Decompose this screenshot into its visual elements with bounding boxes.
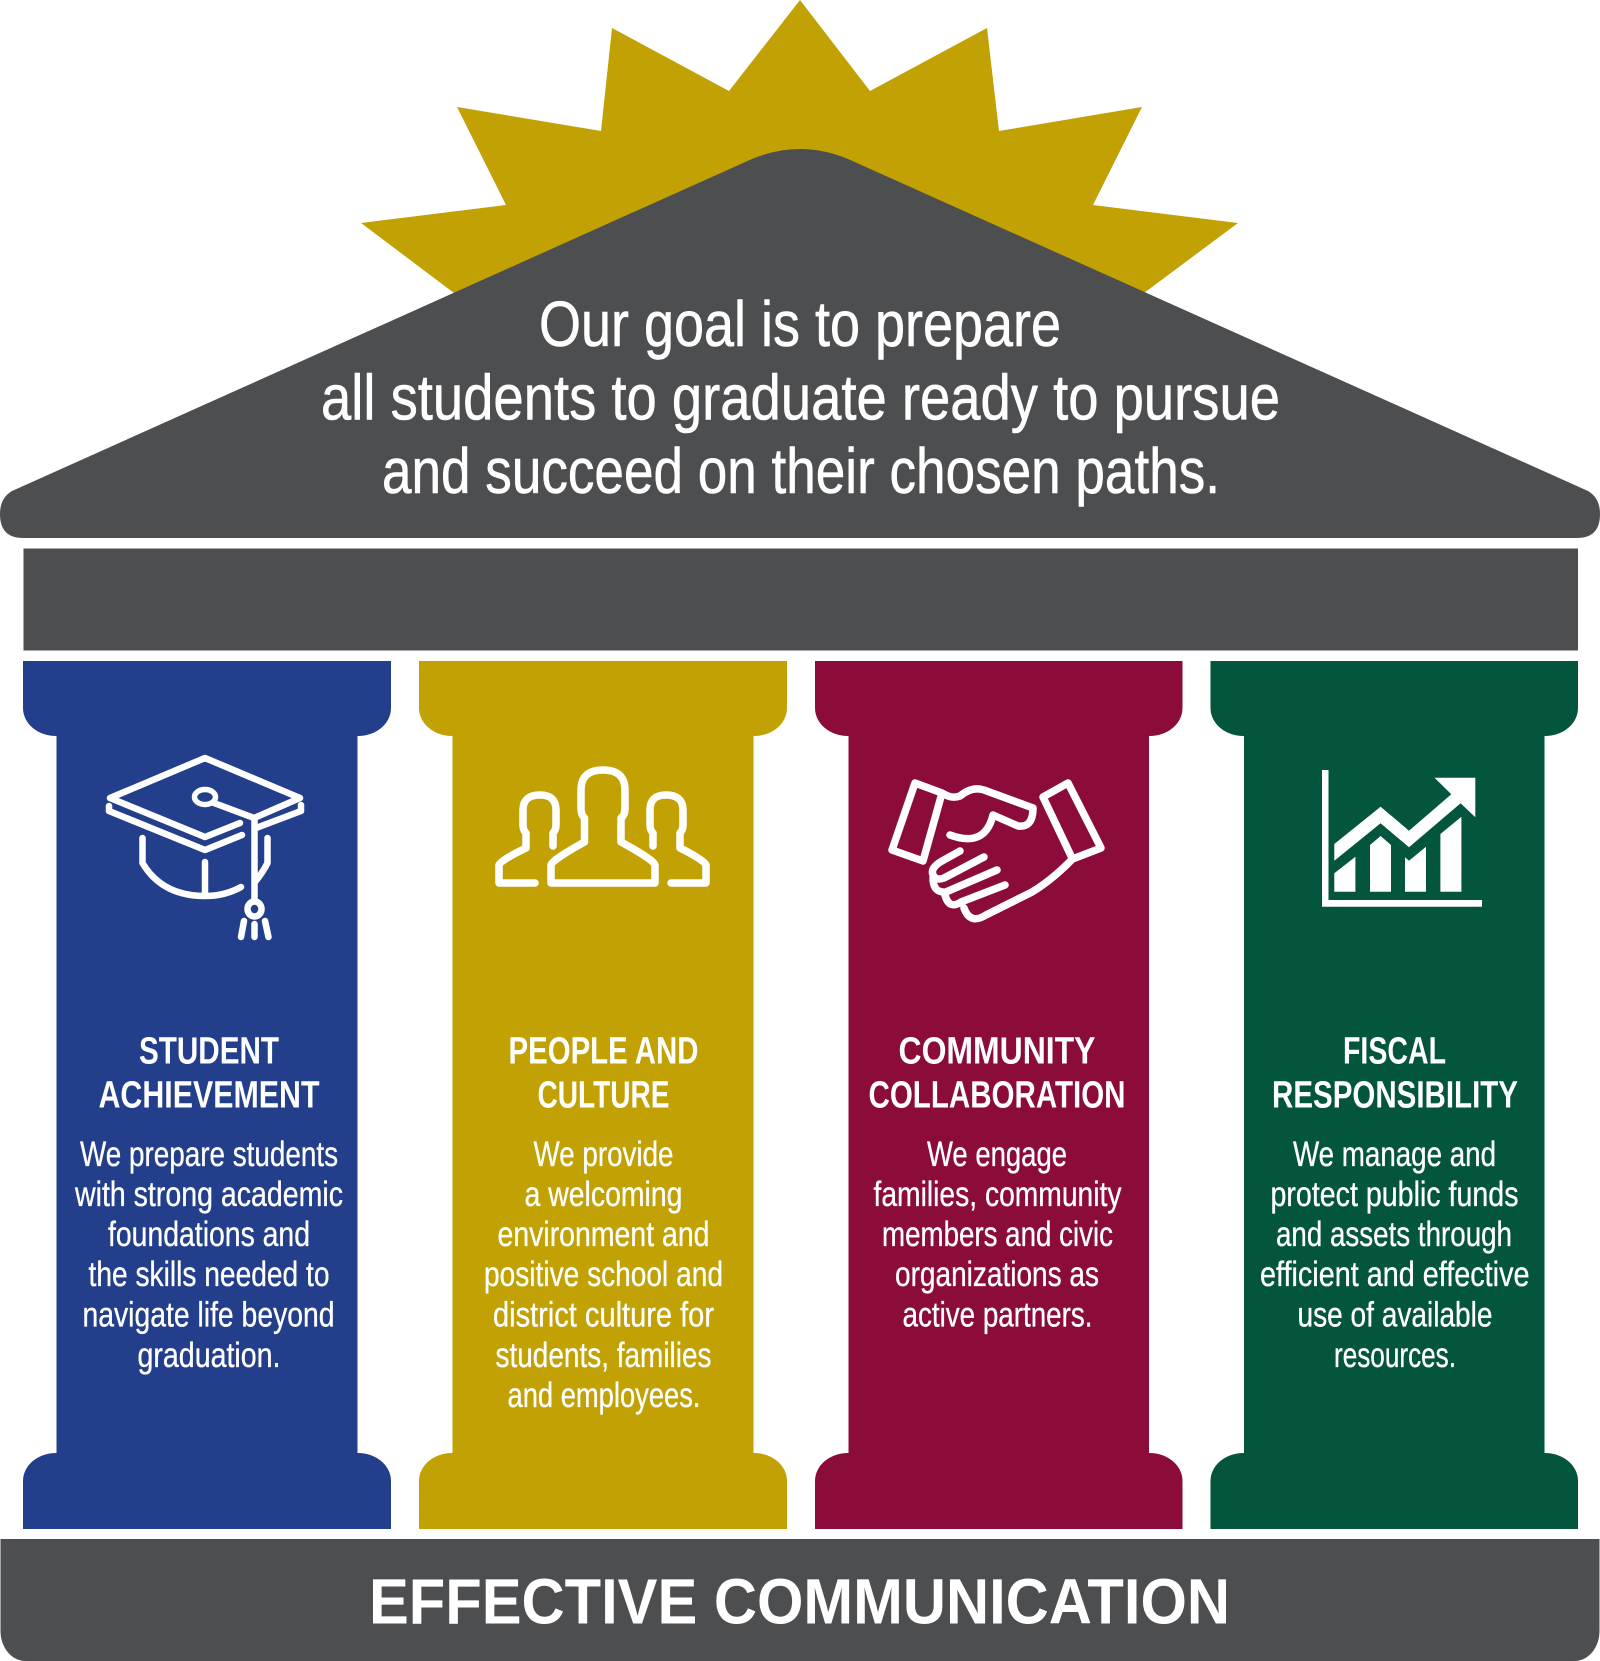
- foundation label: EFFECTIVE COMMUNICATION: [369, 1566, 1230, 1638]
- pillar shape: green: [1210, 661, 1578, 1529]
- text: community collaboration description: members and civic: [882, 1215, 1113, 1254]
- roof: [0, 149, 1600, 538]
- text: fiscal responsibility description: use of available: [1298, 1296, 1492, 1334]
- heading: community collaboration: COLLABORATION: [868, 1074, 1126, 1116]
- icon: group of people: [499, 770, 706, 883]
- text: fiscal responsibility description: We manage and: [1293, 1135, 1496, 1174]
- text: student achievement description: graduation.: [138, 1336, 280, 1375]
- pillar shape: gold: [419, 661, 787, 1529]
- text: community collaboration description: [874, 1135, 1122, 1334]
- heading: people and culture: CULTURE: [538, 1074, 670, 1116]
- heading: student achievement: STUDENT: [139, 1030, 279, 1072]
- pillar shape: blue: [23, 661, 391, 1529]
- text: people and culture description: positive school and: [484, 1255, 723, 1294]
- text: community collaboration description: families, community: [874, 1175, 1122, 1214]
- heading: community collaboration: COMMUNITY: [898, 1030, 1096, 1072]
- foundation base: [0, 1539, 1600, 1661]
- panel: student achievement pillar: [23, 661, 391, 1529]
- goal statement: all students to graduate ready to pursue: [321, 362, 1280, 434]
- text: community collaboration description: We engage: [927, 1135, 1067, 1174]
- text: people and culture description: [484, 1135, 723, 1415]
- text: people and culture description: We provide: [534, 1135, 674, 1174]
- heading: student achievement: ACHIEVEMENT: [98, 1074, 320, 1116]
- text: fiscal responsibility description: protect public funds: [1270, 1175, 1518, 1214]
- icon: handshake: [892, 783, 1101, 919]
- goal statement: and succeed on their chosen paths.: [382, 435, 1220, 507]
- panel: community collaboration pillar: [815, 661, 1183, 1529]
- text: fiscal responsibility description: and assets through: [1276, 1215, 1512, 1254]
- text: student achievement description: [74, 1135, 343, 1375]
- icon: rising bar chart with arrow: [1322, 770, 1482, 907]
- text: student achievement description: foundations and: [108, 1215, 310, 1254]
- text: student achievement description: navigate life beyond: [82, 1296, 334, 1334]
- pillar shape: maroon: [815, 661, 1183, 1529]
- text: community collaboration description: active partners.: [902, 1296, 1092, 1334]
- text: student achievement description: We prepare students: [80, 1135, 338, 1174]
- entablature beam: [24, 548, 1578, 650]
- text: people and culture description: district culture for: [493, 1296, 714, 1334]
- text: community collaboration description: organizations as: [895, 1255, 1099, 1294]
- text: people and culture description: environment and: [498, 1215, 710, 1254]
- text: people and culture description: students, families: [496, 1336, 712, 1375]
- text: people and culture description: a welcoming: [524, 1175, 682, 1214]
- heading: fiscal responsibility: FISCAL: [1343, 1030, 1446, 1072]
- icon: graduation cap: [109, 758, 301, 937]
- heading: people and culture: PEOPLE AND: [508, 1030, 698, 1072]
- text: fiscal responsibility description: resources.: [1334, 1336, 1456, 1375]
- heading: fiscal responsibility: [1272, 1030, 1518, 1116]
- panel: people and culture pillar: [419, 661, 787, 1529]
- panel: fiscal responsibility pillar: [1210, 661, 1578, 1529]
- text: student achievement description: with strong academic: [74, 1175, 343, 1214]
- goal statement: [321, 288, 1280, 507]
- heading: people and culture: [508, 1030, 698, 1116]
- heading: community collaboration: [868, 1030, 1126, 1116]
- text: people and culture description: and employees.: [508, 1376, 700, 1415]
- text: student achievement description: the skills needed to: [88, 1255, 330, 1294]
- heading: student achievement: [98, 1030, 320, 1116]
- sun rays behind roof: [361, 0, 1238, 400]
- goal statement: Our goal is to prepare: [539, 288, 1061, 360]
- text: fiscal responsibility description: efficient and effective: [1260, 1255, 1530, 1294]
- heading: fiscal responsibility: RESPONSIBILITY: [1272, 1074, 1518, 1116]
- text: fiscal responsibility description: [1260, 1135, 1530, 1375]
